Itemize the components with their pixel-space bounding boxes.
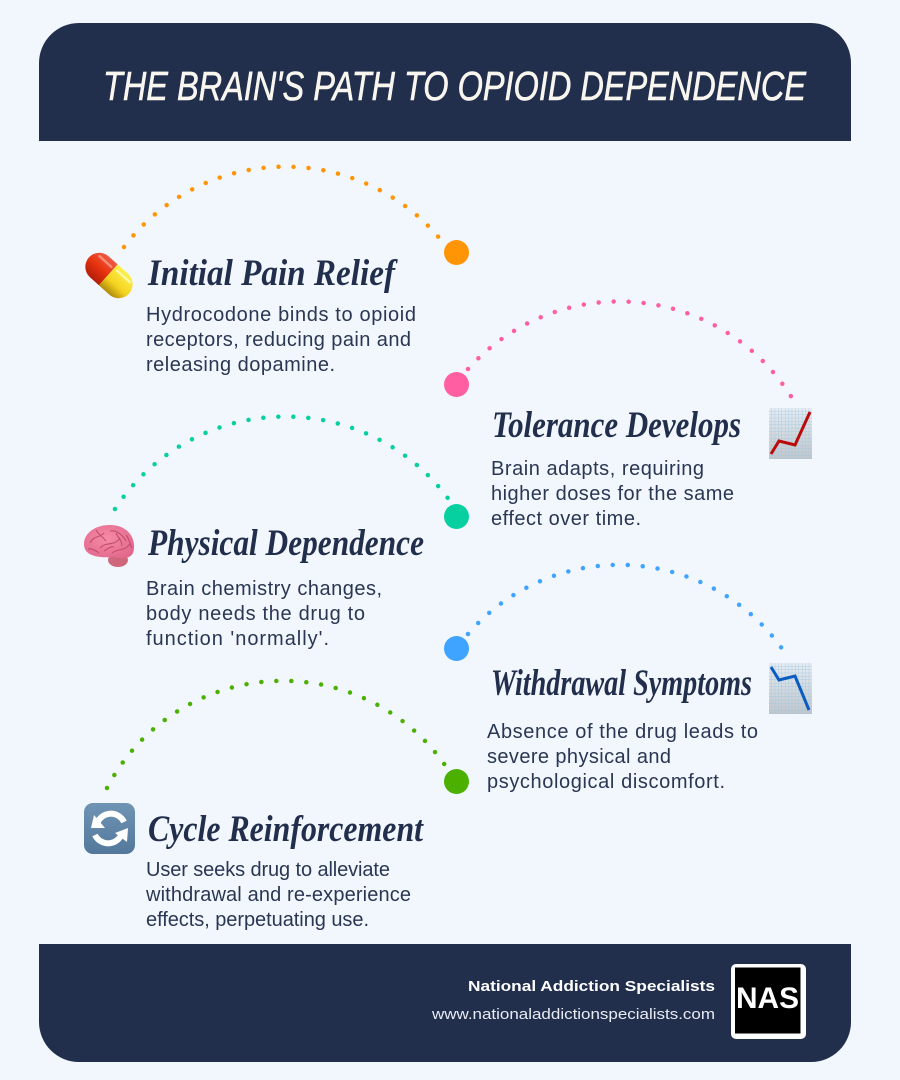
dotted arc: green bbox=[107, 681, 447, 788]
heading: Cycle Reinforcement bbox=[148, 809, 424, 850]
description: function 'normally'. bbox=[146, 628, 329, 650]
node: blue bbox=[444, 636, 469, 661]
description: severe physical and bbox=[487, 746, 671, 768]
icon: pill bbox=[80, 247, 138, 304]
node: pink bbox=[444, 372, 469, 397]
dotted arc: orange bbox=[124, 167, 441, 247]
description: receptors, reducing pain and bbox=[146, 329, 411, 351]
description: body needs the drug to bbox=[146, 603, 365, 625]
description: psychological discomfort. bbox=[487, 771, 725, 793]
description: Absence of the drug leads to bbox=[487, 721, 758, 743]
description: withdrawal and re-experience bbox=[145, 884, 411, 906]
description: Brain adapts, requiring bbox=[491, 458, 704, 480]
description: Hydrocodone binds to opioid bbox=[146, 304, 416, 326]
step 3: physical dependence bbox=[84, 417, 469, 650]
description: effect over time. bbox=[491, 508, 641, 530]
logo: NAS: NAS bbox=[736, 982, 799, 1015]
footer organisation name: National Addiction Specialists bbox=[468, 978, 715, 995]
node: green bbox=[444, 769, 469, 794]
node: orange bbox=[444, 240, 469, 265]
heading: Tolerance Develops bbox=[492, 405, 741, 446]
icon: falling chart bbox=[769, 663, 812, 714]
icon: cycle arrows bbox=[84, 803, 135, 854]
description bbox=[146, 578, 382, 650]
step 4: withdrawal symptoms bbox=[444, 565, 812, 793]
description: User seeks drug to alleviate bbox=[146, 859, 390, 881]
footer website: www.nationaladdictionspecialists.com bbox=[431, 1006, 715, 1023]
icon: rising chart bbox=[769, 408, 812, 459]
description bbox=[145, 859, 411, 931]
step 1: initial pain relief bbox=[80, 167, 469, 376]
step 5: cycle reinforcement bbox=[84, 681, 469, 931]
description: releasing dopamine. bbox=[146, 354, 335, 376]
description: Brain chemistry changes, bbox=[146, 578, 382, 600]
node: teal bbox=[444, 504, 469, 529]
description bbox=[491, 458, 734, 530]
dotted arc: blue bbox=[468, 565, 783, 650]
step 2: tolerance develops bbox=[444, 301, 812, 530]
dotted arc: teal bbox=[115, 417, 450, 509]
description bbox=[487, 721, 758, 793]
logo: NAS bbox=[731, 964, 806, 1039]
heading: Withdrawal Symptoms bbox=[491, 663, 752, 704]
heading: Physical Dependence bbox=[147, 523, 424, 564]
heading: Initial Pain Relief bbox=[147, 253, 398, 294]
icon: brain bbox=[84, 525, 134, 567]
header banner bbox=[39, 23, 851, 141]
description: effects, perpetuating use. bbox=[146, 909, 369, 931]
footer banner bbox=[39, 944, 851, 1062]
dotted arc: pink bbox=[468, 301, 792, 398]
description: higher doses for the same bbox=[491, 483, 734, 505]
description bbox=[146, 304, 416, 376]
